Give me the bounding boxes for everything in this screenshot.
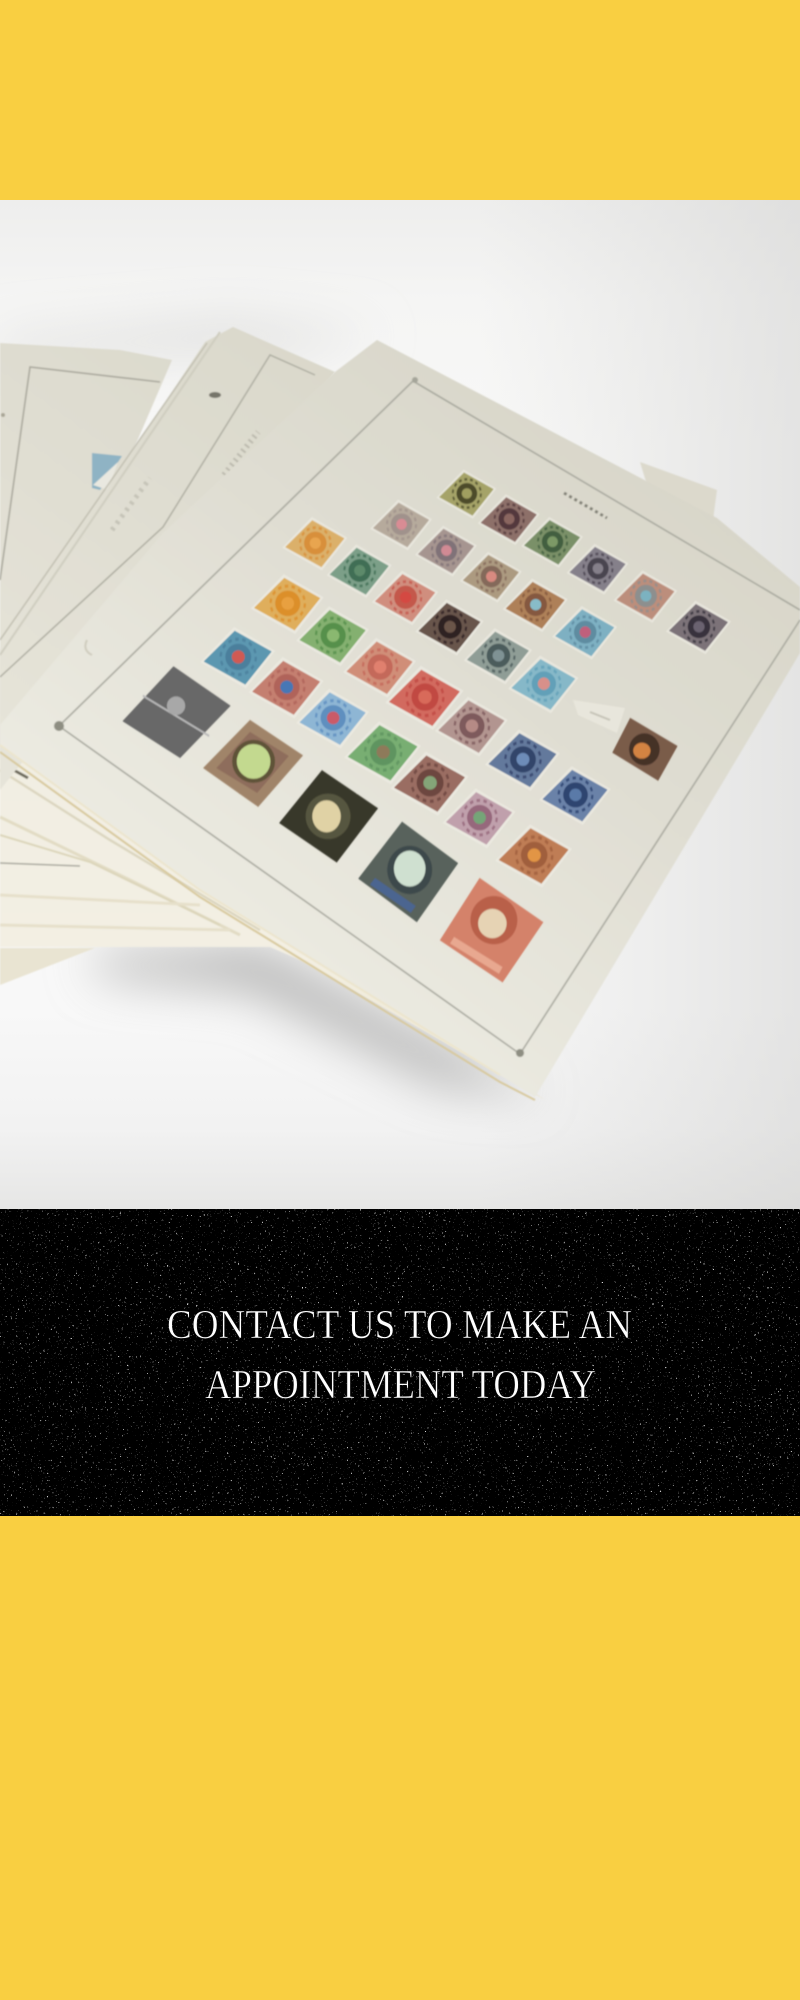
call to action heading: CONTACT US TO MAKE AN [167,1301,632,1347]
far left album page [0,343,172,760]
black starfield panel [0,1209,800,1516]
shadow under pages [0,320,540,1095]
main album page [0,340,800,1100]
lower page stack [0,735,545,1100]
call to action heading: APPOINTMENT TODAY [205,1361,596,1407]
bottom yellow band [0,1516,800,2000]
call to action heading [167,1301,632,1407]
rear page corner [640,462,717,520]
photo: stamp album pages [0,200,800,1210]
postage stamps [122,469,731,982]
middle album pages [0,327,335,790]
top yellow band [0,0,800,200]
